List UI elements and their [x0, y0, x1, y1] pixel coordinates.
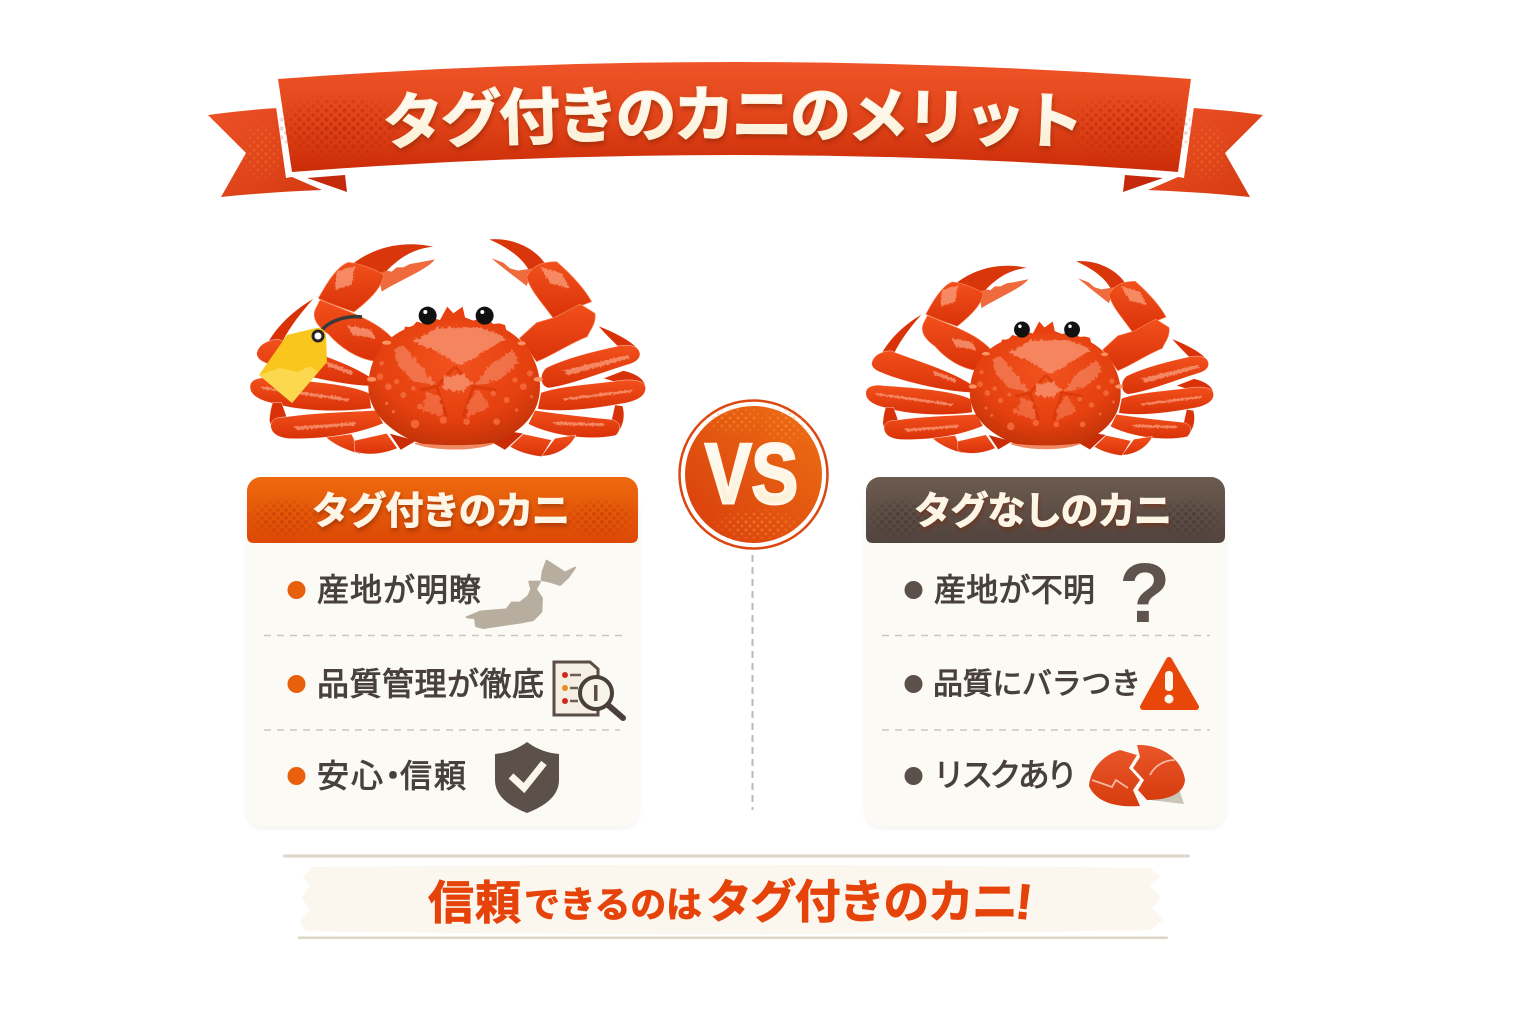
- crab with yellow tag: [250, 239, 646, 457]
- left ribbon tail: [208, 108, 322, 197]
- panel: untagged crab: [866, 477, 1225, 827]
- conclusion text: !: [1013, 873, 1035, 931]
- row: risky: リスクあり: [933, 757, 1078, 793]
- icon: checklist and magnifier: [554, 662, 623, 718]
- panel: tagged crab: [247, 477, 638, 827]
- tagged crab illustration: [250, 239, 646, 457]
- VS badge: [680, 400, 830, 550]
- crab without tag: [866, 261, 1214, 456]
- VS text: VS: [705, 427, 798, 522]
- row: reassurance and trust: ・: [377, 758, 409, 794]
- conclusion band: [283, 854, 1190, 939]
- center dashed divider: [752, 555, 754, 810]
- row: inconsistent quality: 品質にバラつき: [933, 668, 1141, 701]
- panel header: タグ付きのカニ: [312, 491, 570, 533]
- row: reassurance and trust: 安心: [317, 758, 383, 794]
- title banner: [208, 62, 1263, 197]
- icon: warning triangle: [1143, 660, 1196, 707]
- right ribbon tail: [1148, 108, 1263, 197]
- icon: broken shell: [1089, 745, 1185, 806]
- conclusion text: [428, 873, 1035, 931]
- icon: question mark: ?: [1119, 546, 1170, 640]
- conclusion text: タグ付きのカニ: [706, 876, 1018, 928]
- icon: yellow tag: [259, 317, 362, 403]
- conclusion text: できるのは: [524, 884, 702, 925]
- panel header: タグなしのカニ: [914, 491, 1172, 533]
- row: reassurance and trust: 信頼: [400, 758, 466, 794]
- row: quality control: 品質管理が徹底: [317, 666, 544, 702]
- row: origin clear: 産地が明瞭: [317, 572, 481, 608]
- conclusion text: 信頼: [428, 877, 521, 929]
- icon: map of Japan: [467, 561, 575, 628]
- icon: shield with check: [495, 742, 559, 813]
- panel header: [866, 477, 1225, 543]
- title text: タグ付きのカニのメリット: [385, 86, 1078, 152]
- panel header: [247, 477, 638, 543]
- row: origin unknown: 産地が不明: [934, 572, 1095, 608]
- row: reassurance and trust: [288, 758, 466, 794]
